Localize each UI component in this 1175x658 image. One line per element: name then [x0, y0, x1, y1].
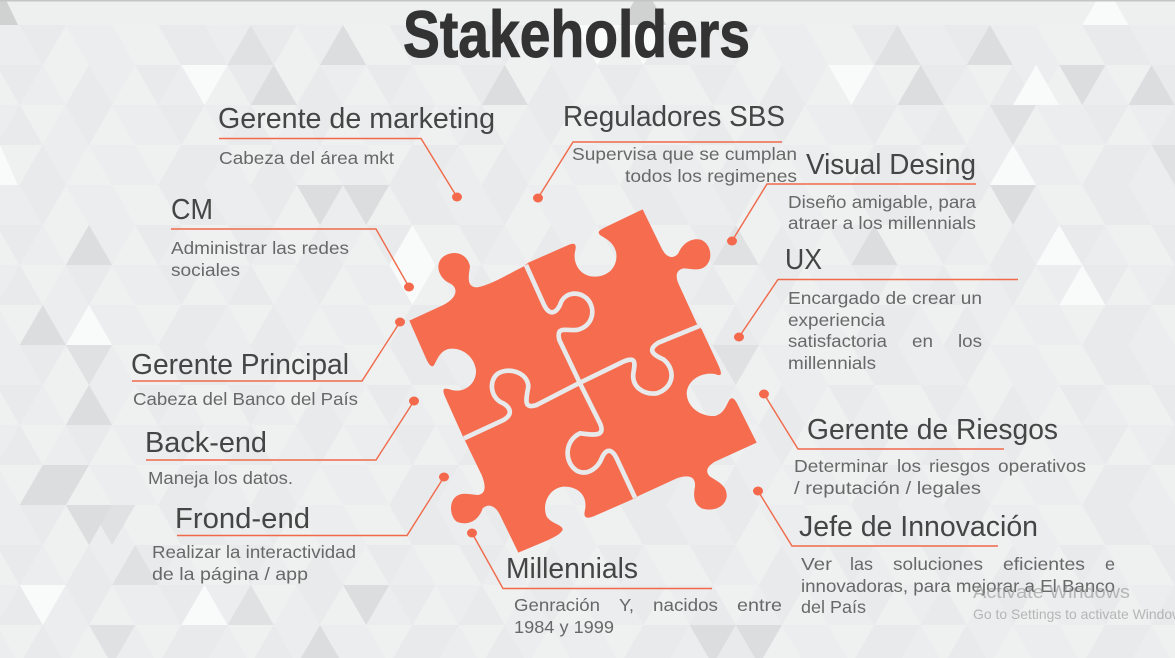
callout: UX: UX: [785, 244, 822, 276]
callout: Millennials: 1984 y 1999: [514, 617, 614, 637]
callout: Reguladores SBS: Supervisa que se cumplan: [572, 144, 797, 164]
callout: Jefe de Innovación: e: [1105, 554, 1115, 574]
callout: Frond-end: [152, 472, 449, 584]
callout: Jefe de Innovación: las: [850, 554, 873, 574]
callout: Visual Desing: atraer a los millennials: [788, 213, 976, 233]
callout: Millennials: Millennials: [506, 553, 638, 585]
callout: Visual Desing: [727, 149, 976, 246]
system watermark: [973, 582, 1175, 622]
callout: UX: los: [958, 331, 982, 351]
callout: Reguladores SBS: Reguladores SBS: [563, 101, 785, 133]
callout: Jefe de Innovación: Jefe de Innovación: [799, 511, 1038, 543]
callout: Back-end: Back-end: [145, 427, 267, 459]
callout: Millennials: [467, 528, 782, 637]
callout: CM: [171, 194, 414, 292]
callout: Jefe de Innovación: [753, 486, 1115, 617]
callout: UX: Encargado de crear un: [788, 288, 982, 308]
callout: Visual Desing: Visual Desing: [806, 149, 976, 181]
puzzle seam: horizontal: [464, 326, 699, 438]
callout: Millennials: Y,: [619, 595, 634, 615]
puzzle seam: vertical: [526, 265, 635, 498]
callout: Gerente de Riesgos: riesgos: [929, 456, 990, 476]
central puzzle: four interlocking pieces: [409, 209, 757, 553]
callout: CM: Administrar las redes: [171, 238, 349, 258]
callout: Gerente de Riesgos: / reputación / legales: [794, 478, 981, 498]
callout: Gerente de marketing: [218, 103, 495, 202]
callout: Gerente de Riesgos: [759, 390, 1086, 498]
callout: CM: CM: [171, 194, 213, 226]
callout: Millennials: nacidos: [653, 595, 718, 615]
callout: CM: sociales: [171, 260, 240, 280]
callout: Gerente de marketing: Gerente de marketing: [218, 103, 495, 135]
callout: UX: [734, 244, 1018, 373]
callout: Jefe de Innovación: eficientes: [1003, 554, 1085, 574]
callout: UX: en: [912, 331, 933, 351]
callout: Millennials: Genración: [514, 595, 600, 615]
callout: UX: satisfactoria: [788, 331, 887, 351]
callout: Gerente de Riesgos: los: [897, 456, 921, 476]
system watermark: Activate Windows: [973, 582, 1130, 602]
callout: Reguladores SBS: todos los regimenes: [625, 166, 797, 186]
callout: Gerente Principal: Cabeza del Banco del País: [133, 389, 358, 409]
callout: Visual Desing: Diseño amigable, para: [788, 192, 976, 212]
callout: Jefe de Innovación: innovadoras, para mejorar a El Banco: [801, 576, 1115, 596]
callout: Gerente de Riesgos: Determinar: [794, 456, 888, 476]
callout: Gerente Principal: Gerente Principal: [131, 349, 349, 381]
callout: Reguladores SBS: [533, 101, 797, 202]
callout: UX: millennials: [788, 353, 876, 373]
callout: Frond-end: de la página / app: [152, 564, 308, 584]
callout: UX: experiencia: [788, 310, 885, 330]
callout: Millennials: entre: [737, 595, 782, 615]
puzzle silhouette: [409, 209, 757, 553]
callout: Frond-end: Realizar la interactividad: [152, 542, 356, 562]
callout: Jefe de Innovación: soluciones: [893, 554, 983, 574]
callout: Frond-end: Frond-end: [175, 503, 310, 535]
callout: Jefe de Innovación: del País: [801, 597, 866, 617]
callout: Gerente de Riesgos: Gerente de Riesgos: [807, 414, 1058, 446]
callout: Gerente de marketing: Cabeza del área mkt: [219, 148, 394, 168]
callout: Back-end: Maneja los datos.: [148, 468, 293, 488]
callout: Jefe de Innovación: Ver: [801, 554, 832, 574]
callout: Back-end: [145, 396, 419, 488]
callout: Gerente Principal: [131, 318, 405, 409]
callout: Gerente de Riesgos: operativos: [998, 456, 1086, 476]
